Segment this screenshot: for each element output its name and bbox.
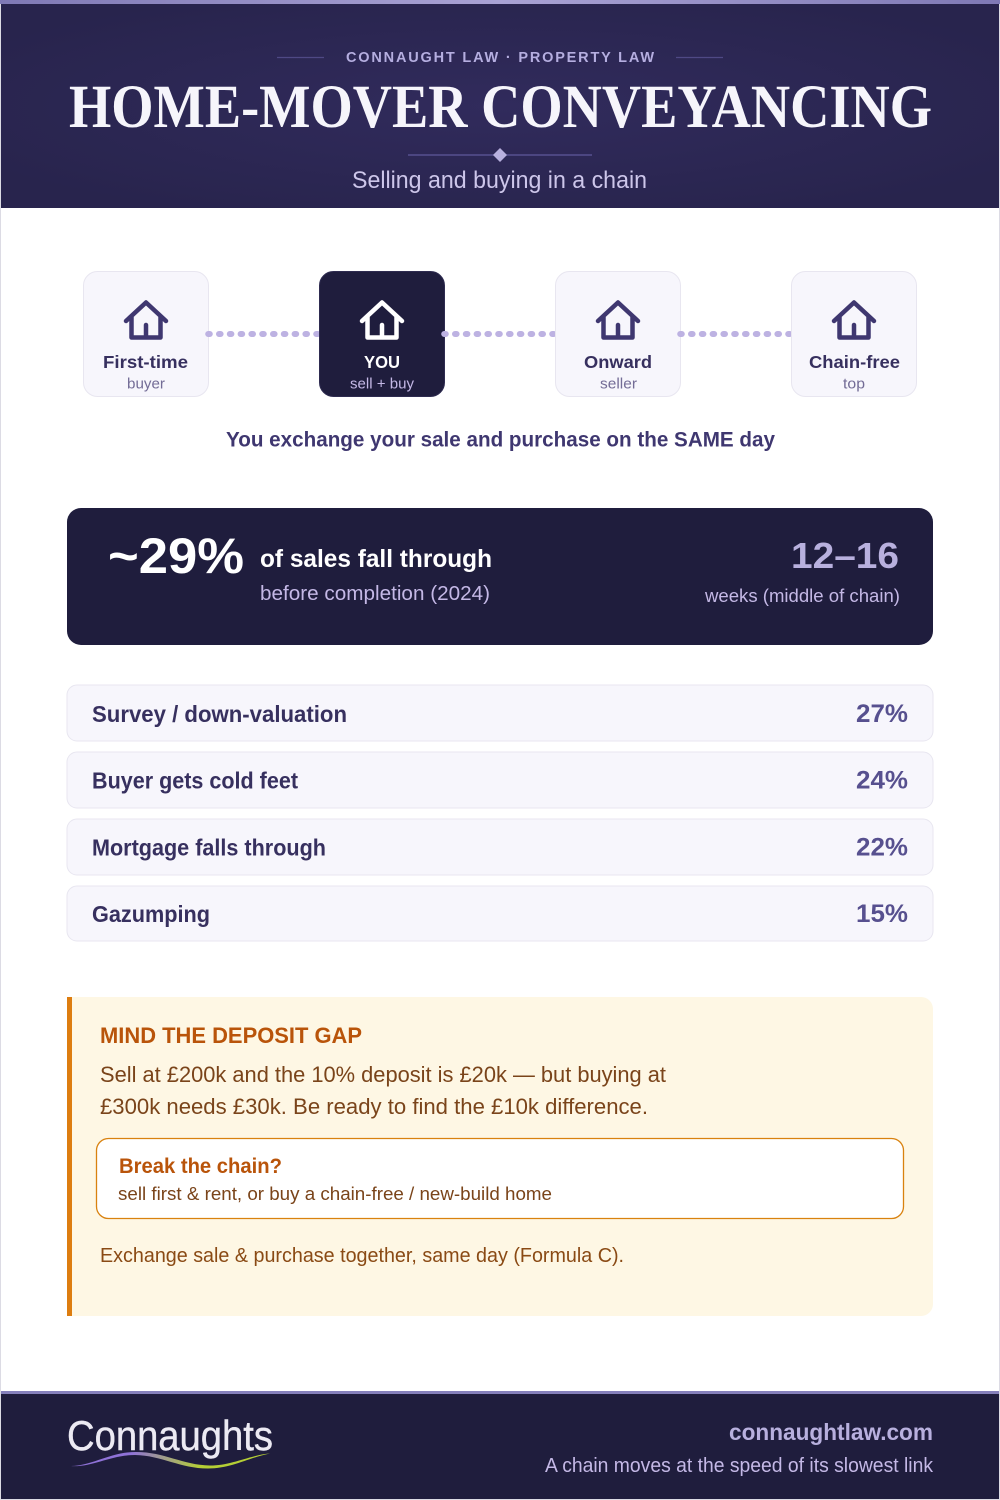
stat: weeks: weeks (middle of chain) xyxy=(704,585,900,606)
card: you xyxy=(320,272,444,396)
chain caption: You exchange your sale and purchase on the SAME day xyxy=(226,428,775,452)
website: connaughtlaw.com xyxy=(729,1419,933,1445)
stat: 29 percent: of sales fall through xyxy=(260,545,492,573)
fall-through reasons list xyxy=(67,685,933,941)
row: cold feet: Buyer gets cold feet xyxy=(92,768,298,794)
callout body: Sell at £200k and the 10% deposit is £20k — but buying at xyxy=(100,1062,666,1087)
stat: 29 percent: ~29% xyxy=(108,528,244,584)
card: onward seller: seller xyxy=(600,376,637,392)
stat: 29 percent: before completion (2024) xyxy=(260,582,490,605)
card: you: sell + buy xyxy=(350,376,415,392)
row: survey: 27% xyxy=(856,700,908,728)
row: mortgage xyxy=(67,819,933,875)
callout: deposit gap xyxy=(67,997,933,1316)
callout note: Exchange sale & purchase together, same day (Formula C). xyxy=(100,1244,624,1267)
row: survey: Survey / down-valuation xyxy=(92,701,347,727)
card: onward seller xyxy=(556,272,680,396)
chain diagram xyxy=(84,272,916,396)
callout body: £300k needs £30k. Be ready to find the £10k difference. xyxy=(100,1094,648,1119)
callout heading: MIND THE DEPOSIT GAP xyxy=(100,1023,362,1048)
break the chain box xyxy=(96,1138,904,1218)
tagline: A chain moves at the speed of its slowest link xyxy=(545,1455,934,1477)
row: gazumping: 15% xyxy=(856,900,908,928)
eyebrow: CONNAUGHT LAW · PROPERTY LAW xyxy=(346,50,654,66)
row: gazumping: Gazumping xyxy=(92,901,210,927)
panel: headline stats xyxy=(67,508,933,645)
card: first-time buyer xyxy=(84,272,208,396)
card: first-time buyer: First-time xyxy=(103,352,188,372)
stat: weeks xyxy=(704,535,900,606)
dotted connector 1 xyxy=(208,331,318,337)
row: cold feet xyxy=(67,752,933,808)
card: chain-free top: top xyxy=(843,376,865,392)
row: gazumping xyxy=(67,886,933,941)
callout body xyxy=(100,1062,666,1119)
card: chain-free top xyxy=(792,272,916,396)
row: mortgage: 22% xyxy=(856,834,908,862)
card: chain-free top: Chain-free xyxy=(809,352,900,372)
dotted connector 3 xyxy=(680,331,790,337)
row: survey xyxy=(67,685,933,741)
footer xyxy=(1,1391,999,1499)
stat: 29 percent xyxy=(108,528,492,605)
row: cold feet: 24% xyxy=(856,766,908,794)
card: onward seller: Onward xyxy=(584,352,652,372)
break the chain box: Break the chain? xyxy=(119,1155,282,1178)
diamond divider xyxy=(408,148,592,162)
logo: Connaughts xyxy=(67,1412,273,1459)
card: first-time buyer: buyer xyxy=(127,376,165,392)
header banner xyxy=(0,0,1000,208)
dotted connector 2 xyxy=(444,331,554,337)
stat: weeks: 12–16 xyxy=(791,535,899,576)
card: you: YOU xyxy=(364,352,400,372)
row: mortgage: Mortgage falls through xyxy=(92,834,326,860)
subtitle: Selling and buying in a chain xyxy=(352,167,647,194)
break the chain box: sell first & rent, or buy a chain-free / new-build home xyxy=(118,1183,552,1204)
